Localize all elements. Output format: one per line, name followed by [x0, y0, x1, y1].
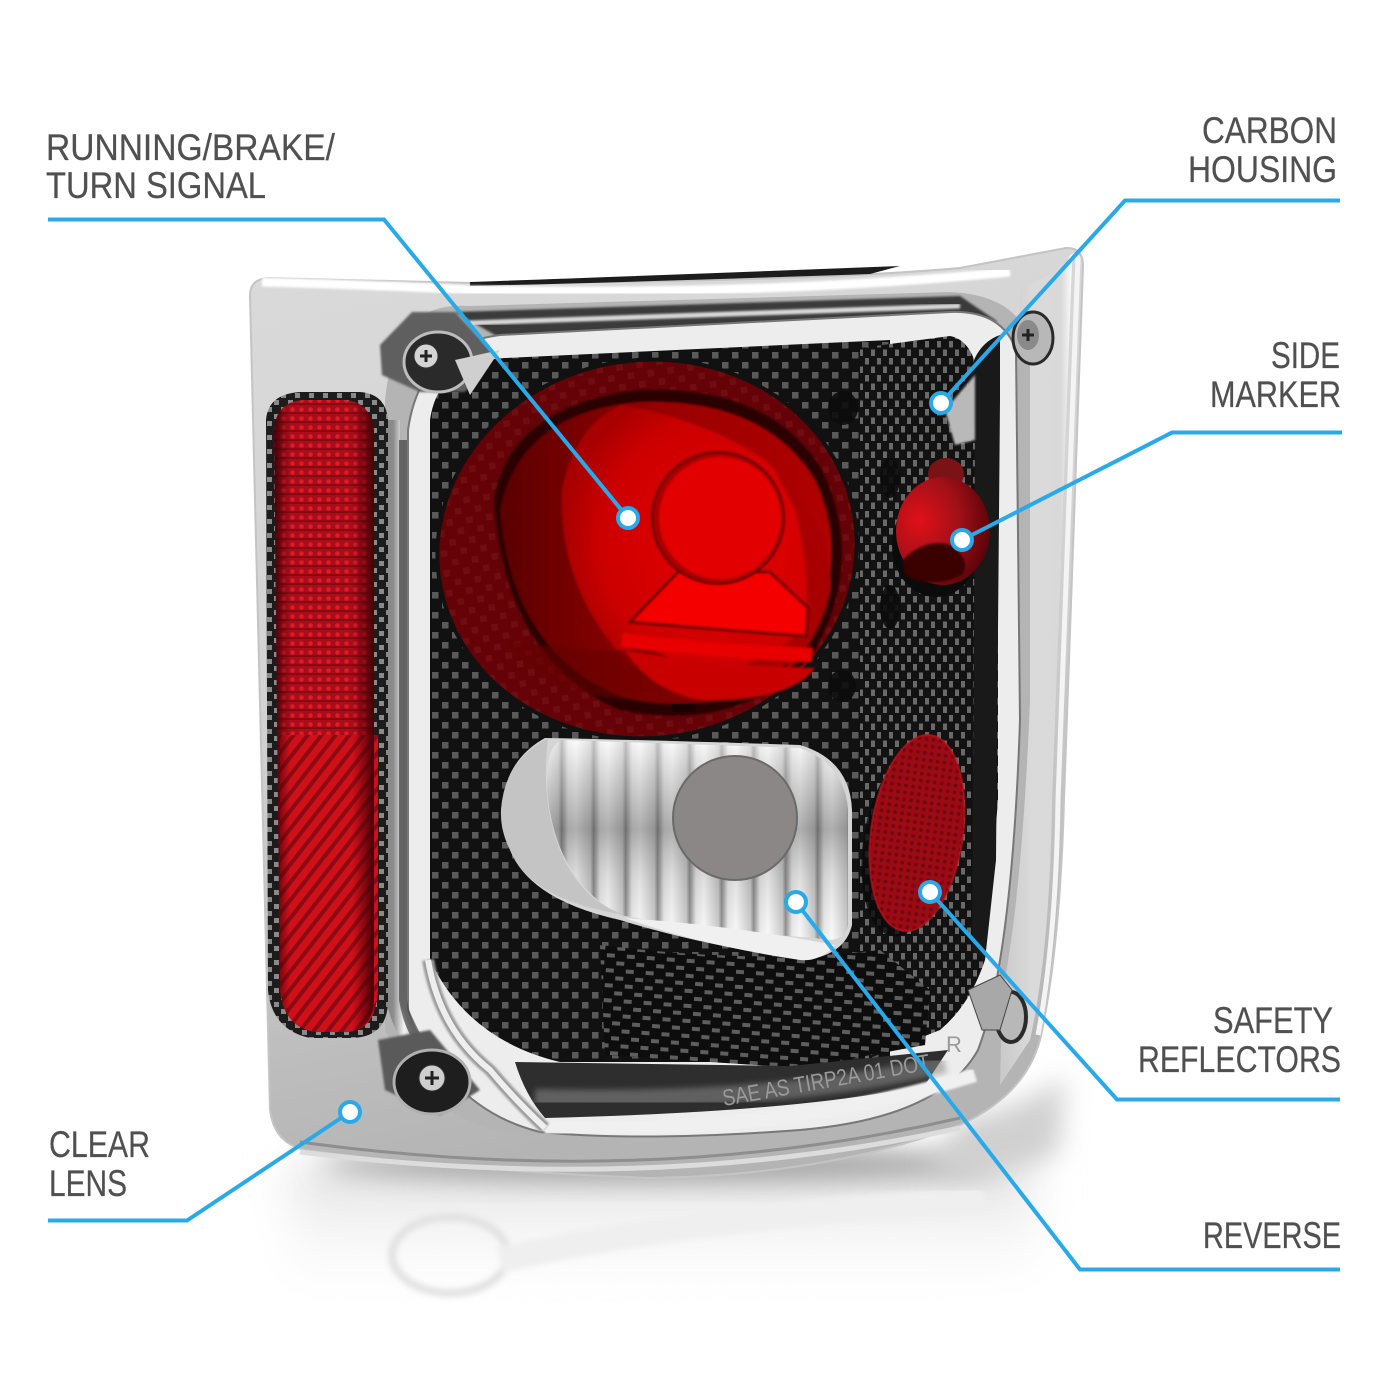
moulded lens text: SAE AS TIRP2A 01 DOT	[720, 1049, 932, 1111]
side reflector	[266, 392, 388, 1038]
tail light assembly: R	[946, 1032, 962, 1057]
screws	[378, 312, 1053, 1115]
callout: carbon housing	[931, 110, 1340, 413]
inner chrome frame	[408, 312, 1020, 1137]
callout: side marker: MARKER	[1210, 374, 1341, 415]
callout: side marker	[952, 335, 1342, 550]
callout: carbon housing: CARBON	[1202, 110, 1337, 151]
wavy carbon band	[600, 945, 930, 1068]
callout: running/brake/turn signal: TURN SIGNAL	[46, 165, 266, 206]
clear lens plate	[250, 248, 1083, 1178]
side marker dome	[892, 458, 990, 597]
callout: safety reflectors: SAFETY	[1213, 1000, 1333, 1041]
tail light assembly	[250, 248, 1083, 1178]
callout: reverse: REVERSE	[1203, 1215, 1341, 1256]
callout: running/brake/turn signal: RUNNING/BRAKE/	[46, 127, 336, 168]
running/brake/turn lens	[410, 330, 884, 768]
carbon panel, right	[860, 336, 998, 1062]
callout: reverse	[786, 892, 1341, 1270]
reverse lens	[501, 738, 852, 960]
mounting holes	[828, 391, 900, 702]
callout: clear lens: CLEAR	[49, 1124, 150, 1165]
callout: safety reflectors	[920, 882, 1341, 1100]
lens bulb socket	[652, 452, 784, 584]
callout: clear lens: LENS	[49, 1163, 127, 1204]
callout: clear lens	[48, 1102, 360, 1220]
chrome housing trough	[385, 292, 1030, 1138]
safety reflector	[851, 729, 976, 942]
product reflection	[290, 1075, 1065, 1293]
callout: carbon housing: HOUSING	[1188, 149, 1337, 190]
callout: safety reflectors: REFLECTORS	[1138, 1039, 1341, 1080]
carbon panel, left	[430, 340, 890, 1062]
callout: running/brake/turn signal	[46, 127, 638, 528]
callout: side marker: SIDE	[1271, 335, 1340, 376]
